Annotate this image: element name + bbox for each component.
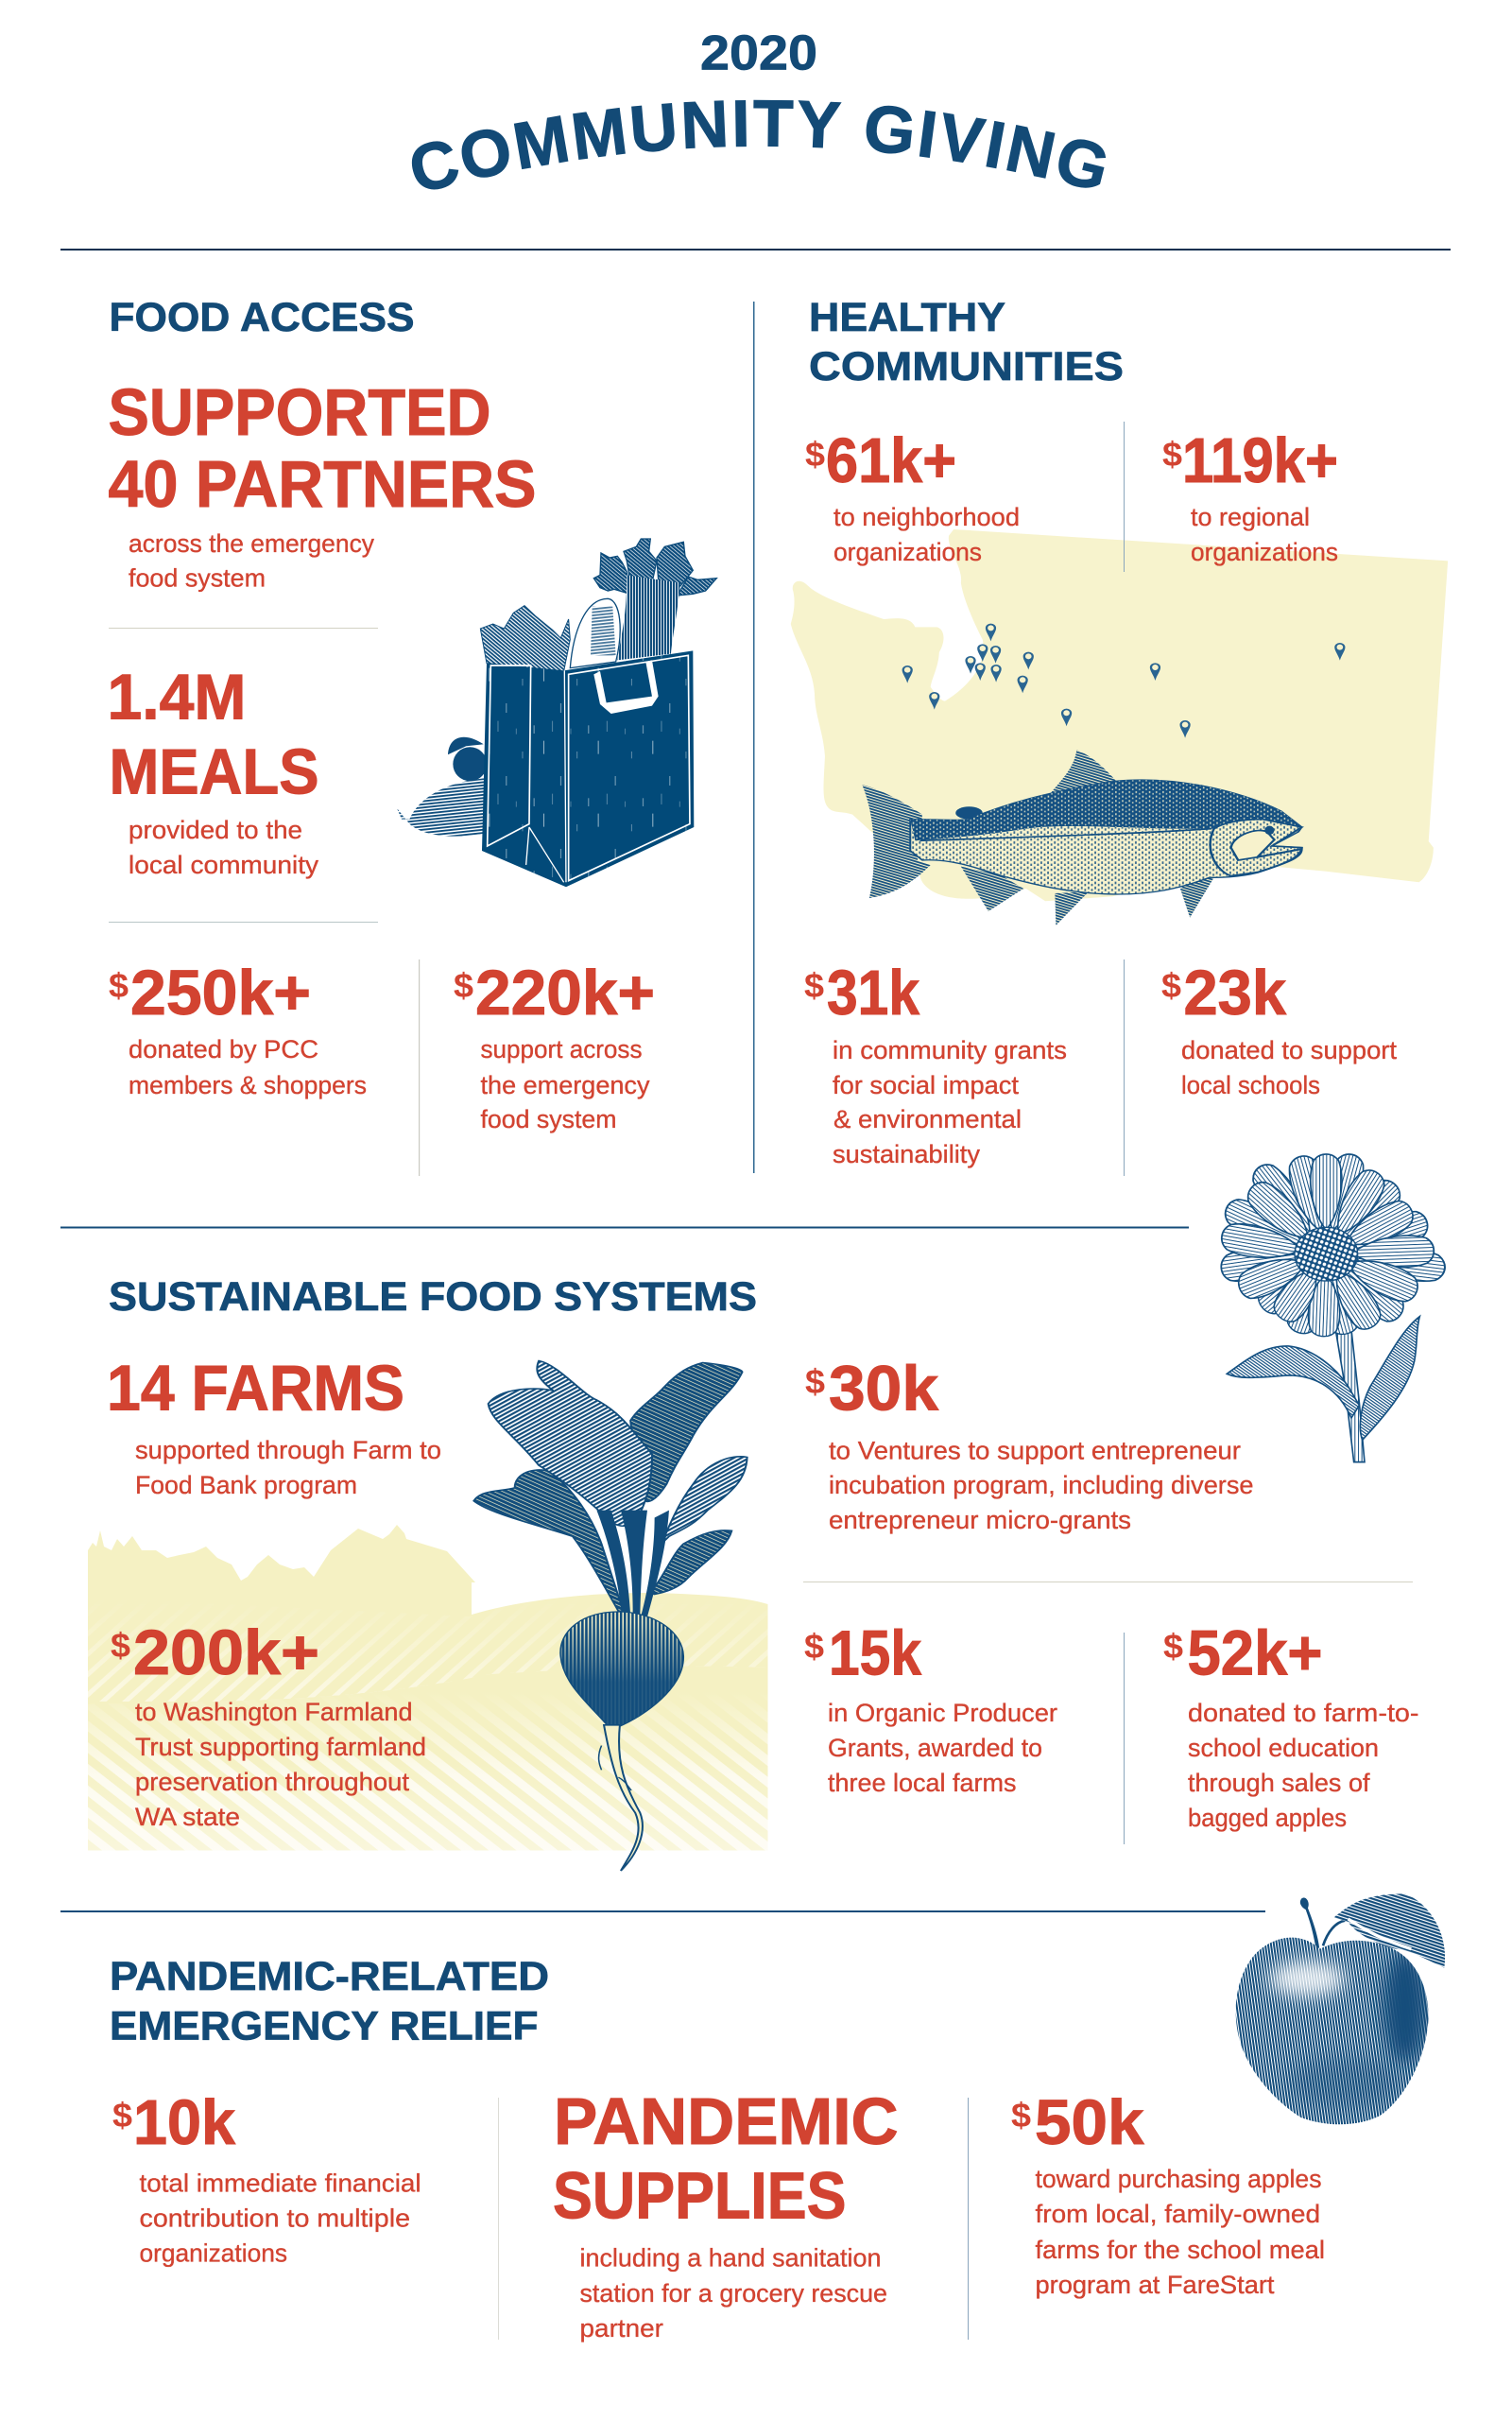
- heading: pandemic-related emergency relief: EMERGENCY RELIEF: [110, 2004, 539, 2049]
- scene: farm landscape: [88, 1525, 767, 1851]
- stat: $250k+: 250k+: [130, 958, 311, 1028]
- stat: $61k+: to neighborhood: [833, 503, 1020, 531]
- stat: 1.4M meals: [108, 662, 319, 879]
- stat: $15k: 15k: [829, 1618, 922, 1688]
- stat: $23k: donated to support: [1181, 1036, 1397, 1064]
- stat: $250k+: [109, 958, 367, 1099]
- stat: $15k: $: [804, 1627, 824, 1666]
- panel: healthy communities: [791, 295, 1448, 1176]
- stat: $23k: 23k: [1183, 958, 1287, 1028]
- stat: supported 40 partners: SUPPORTED: [108, 375, 491, 449]
- stat: $50k: from local, family-owned: [1036, 2200, 1320, 2228]
- heading: pandemic-related emergency relief: [110, 1954, 549, 2049]
- stat: $220k+: [454, 958, 655, 1133]
- stat: $15k: Grants, awarded to: [828, 1734, 1042, 1762]
- stat: $10k: 10k: [133, 2087, 236, 2158]
- stat: pandemic supplies: SUPPLIES: [553, 2159, 847, 2233]
- curved heading: COMMUNITY GIVING: [412, 100, 1106, 189]
- icon: beet: [473, 1361, 747, 1871]
- stat: $52k+: through sales of: [1188, 1769, 1370, 1797]
- stat: $200k+: preservation throughout: [135, 1768, 410, 1796]
- stat: 1.4M meals: MEALS: [110, 735, 319, 807]
- stat: $220k+: 220k+: [475, 958, 655, 1028]
- stat: $30k: [805, 1354, 1253, 1534]
- stat: $61k+: $: [805, 435, 825, 474]
- stat: $10k: $: [112, 2096, 132, 2135]
- heading: healthy communities: COMMUNITIES: [809, 344, 1124, 389]
- stat: $119k+: $: [1162, 435, 1182, 474]
- stat: $200k+: WA state: [135, 1803, 240, 1831]
- stat: $119k+: organizations: [1191, 538, 1338, 566]
- stat: $15k: in Organic Producer: [828, 1699, 1057, 1727]
- stat: supported 40 partners: food system: [129, 563, 266, 592]
- stat: $10k: organizations: [140, 2238, 287, 2267]
- stat: $10k: contribution to multiple: [140, 2204, 410, 2233]
- stat: $23k: [1161, 958, 1397, 1099]
- stat: $23k: local schools: [1181, 1071, 1320, 1099]
- stat: $30k: entrepreneur micro-grants: [829, 1506, 1131, 1534]
- stat: pandemic supplies: PANDEMIC: [554, 2084, 898, 2158]
- stat: $61k+: [805, 425, 1020, 566]
- stat: $119k+: 119k+: [1182, 425, 1338, 496]
- stat: $50k: [1011, 2087, 1325, 2299]
- stat: $50k: farms for the school meal: [1036, 2236, 1325, 2264]
- stat: $30k: 30k: [829, 1354, 939, 1424]
- stat: $31k: $: [804, 966, 824, 1005]
- stat: $250k+: members & shoppers: [129, 1071, 367, 1099]
- stat: $200k+: Trust supporting farmland: [135, 1733, 426, 1761]
- stat: $220k+: $: [454, 966, 473, 1005]
- icon: map pins: [902, 624, 1345, 738]
- stat: $31k: sustainability: [833, 1140, 981, 1168]
- stat: $15k: three local farms: [828, 1769, 1017, 1797]
- stat: $119k+: [1162, 425, 1338, 566]
- panel: sustainable food systems: [88, 1150, 1447, 1871]
- stat: pandemic supplies: station for a grocery rescue: [580, 2279, 887, 2308]
- stat: $200k+: to Washington Farmland: [135, 1698, 412, 1726]
- stat: supported 40 partners: 40 PARTNERS: [108, 447, 537, 521]
- stat: $52k+: $: [1163, 1627, 1183, 1666]
- stat: $31k: in community grants: [833, 1036, 1067, 1064]
- year: 2020: [700, 26, 817, 81]
- stat: $52k+: [1163, 1618, 1419, 1832]
- stat: $23k: $: [1161, 966, 1181, 1005]
- stat: pandemic supplies: including a hand sanitation: [580, 2244, 881, 2273]
- stat: 14 farms: Food Bank program: [135, 1471, 357, 1499]
- stat: 1.4M meals: provided to the: [129, 816, 302, 844]
- stat: $52k+: 52k+: [1187, 1618, 1323, 1688]
- stat: $200k+: [111, 1617, 426, 1831]
- stat: pandemic supplies: [553, 2084, 898, 2342]
- stat: $220k+: support across: [480, 1035, 643, 1063]
- stat: $52k+: school education: [1188, 1734, 1379, 1762]
- icon: salmon: [862, 750, 1302, 925]
- stat: $119k+: to regional: [1191, 503, 1310, 531]
- stat: $61k+: organizations: [833, 538, 982, 566]
- stat: $31k: & environmental: [833, 1105, 1022, 1133]
- stat: $50k: program at FareStart: [1036, 2271, 1275, 2299]
- map: Washington state: [791, 529, 1448, 901]
- stat: $220k+: the emergency: [480, 1071, 650, 1099]
- stat: 1.4M meals: 1.4M: [108, 662, 246, 734]
- panel: food access: [108, 295, 716, 1176]
- stat: 14 farms: [107, 1352, 441, 1499]
- stat: $200k+: $: [111, 1626, 130, 1665]
- stat: $61k+: 61k+: [826, 425, 956, 496]
- stat: $30k: $: [805, 1362, 825, 1401]
- stat: $31k: for social impact: [833, 1071, 1019, 1099]
- heading: healthy communities: [809, 295, 1124, 389]
- stat: 1.4M meals: local community: [129, 851, 319, 879]
- stat: $50k: toward purchasing apples: [1036, 2165, 1321, 2193]
- heading: sustainable food systems: SUSTAINABLE FOOD SYSTEMS: [109, 1274, 757, 1320]
- panel: pandemic-related emergency relief: [110, 1893, 1445, 2342]
- icon: apple: [1236, 1893, 1445, 2124]
- stat: pandemic supplies: partner: [580, 2314, 663, 2342]
- stat: 14 farms: supported through Farm to: [135, 1436, 441, 1464]
- stat: $31k: [804, 958, 1067, 1168]
- stat: $10k: total immediate financial: [140, 2169, 421, 2197]
- icon: grocery bag: [397, 539, 716, 887]
- title: 2020 Community Giving: [412, 26, 1106, 189]
- stat: 14 farms: 14 FARMS: [107, 1352, 404, 1424]
- heading: food access: FOOD ACCESS: [110, 295, 414, 340]
- stat: $30k: incubation program, including diverse: [829, 1471, 1253, 1499]
- stat: $52k+: donated to farm-to-: [1188, 1699, 1419, 1727]
- stat: $220k+: food system: [480, 1105, 616, 1133]
- stat: $30k: to Ventures to support entrepreneur: [829, 1437, 1241, 1465]
- stat: $52k+: bagged apples: [1188, 1804, 1347, 1832]
- stat: $50k: 50k: [1035, 2087, 1144, 2158]
- stat: $10k: [112, 2087, 421, 2267]
- stat: supported 40 partners: across the emergency: [129, 529, 374, 558]
- stat: $200k+: 200k+: [133, 1617, 319, 1688]
- stat: $250k+: $: [109, 966, 129, 1005]
- stat: $15k: [804, 1618, 1057, 1797]
- heading: pandemic-related emergency relief: PANDEMIC-RELATED: [110, 1954, 549, 1999]
- heading: healthy communities: HEALTHY: [809, 295, 1005, 340]
- stat: $31k: 31k: [827, 958, 920, 1028]
- stat: $250k+: donated by PCC: [129, 1035, 318, 1063]
- stat: $50k: $: [1011, 2096, 1031, 2135]
- stat: supported 40 partners: [108, 375, 537, 592]
- icon: daisy flower: [1219, 1150, 1447, 1462]
